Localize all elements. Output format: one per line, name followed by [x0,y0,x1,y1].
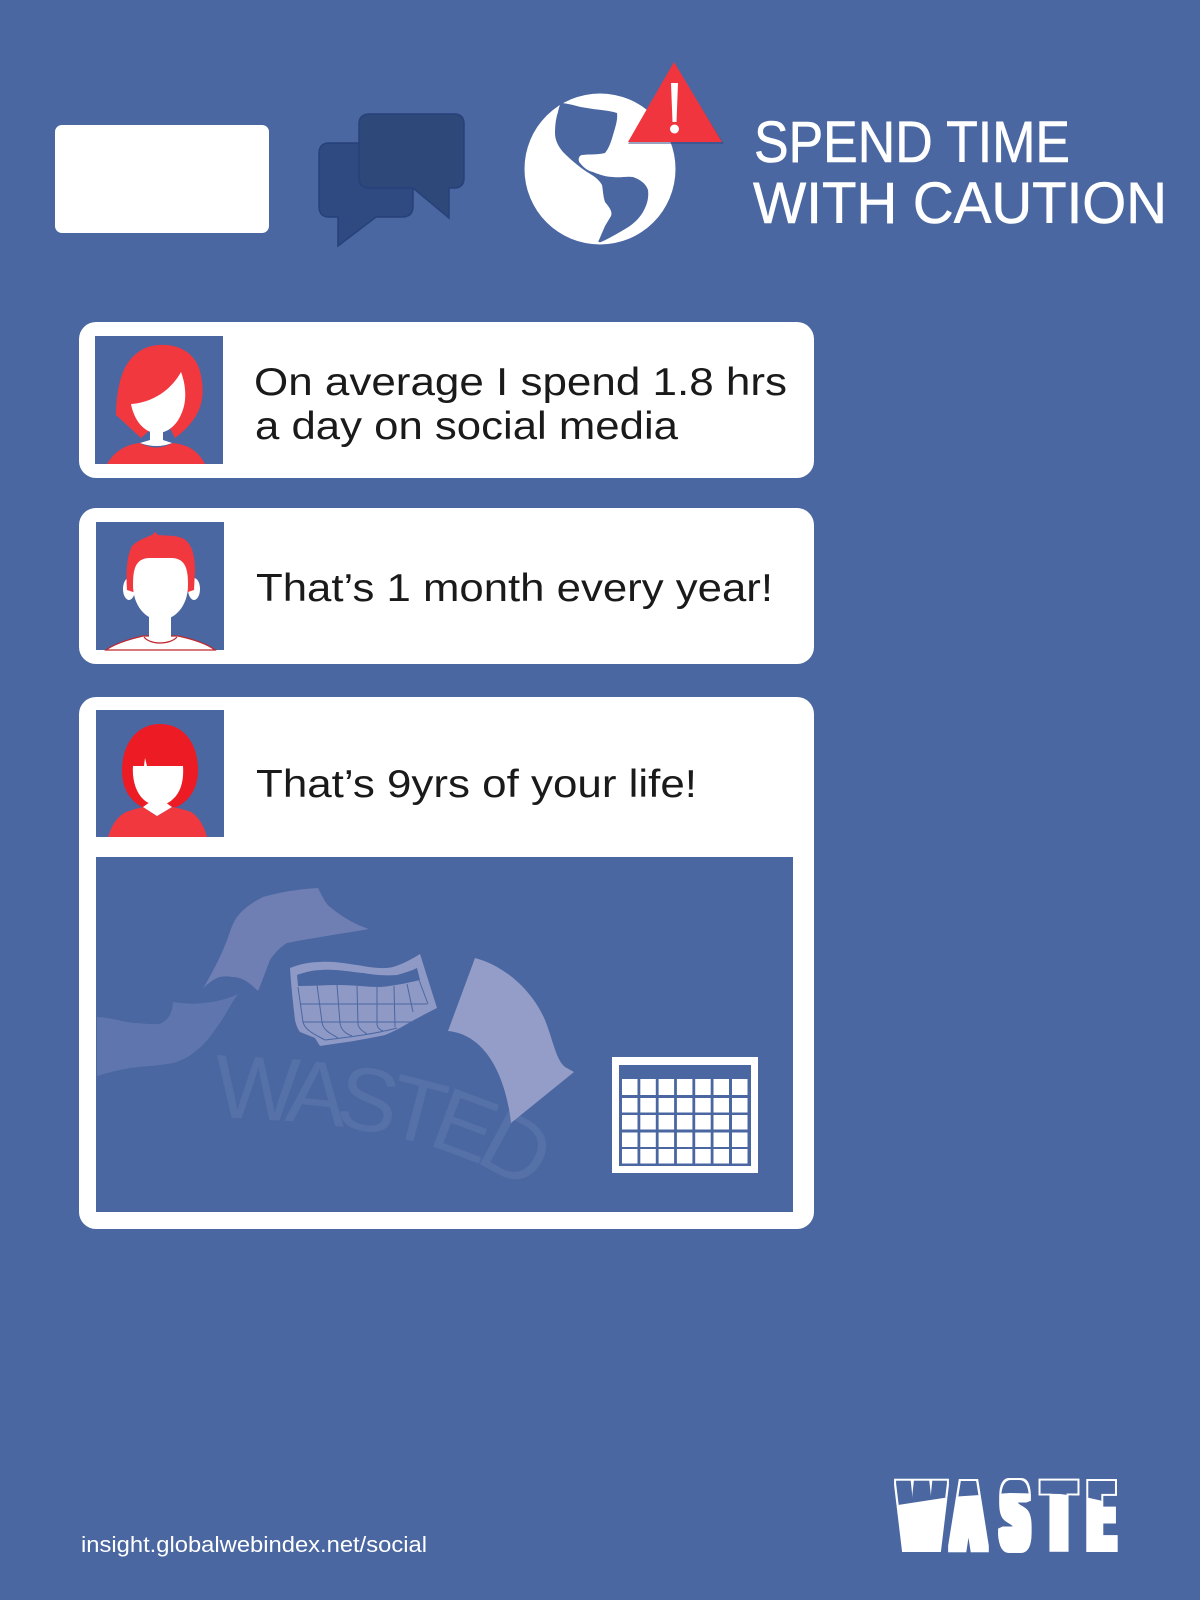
icon: chat bubbles [319,114,464,246]
logo: WASTE: S [1003,1461,1027,1570]
logo: WASTE: S [1003,1461,1027,1570]
avatar: man with short hair [96,522,224,650]
footer source link: insight.globalwebindex.net/social [81,1532,427,1557]
logo: WASTE: W [900,1461,943,1570]
logo: WASTE: A [953,1461,984,1570]
panel: nine years card [79,697,814,1229]
card text: That’s 9yrs of your life! [256,763,697,806]
avatar: woman with side-swept hair [95,336,223,464]
calendar fragment: medium [203,888,369,991]
logo: WASTE: A [953,1461,984,1570]
panel: flying calendar illustration [96,857,793,1212]
card text: That’s 1 month every year! [256,567,773,610]
logo: WASTE [894,1478,1118,1553]
wasted arc text: WASTED [217,1055,546,1179]
avatar: woman with bob hair [96,710,224,837]
card text: On average I spend 1.8 hrs [254,361,787,404]
calendar fragment: strong [448,958,574,1123]
title: SPEND TIME [754,110,1070,175]
card text: a day on social media [255,405,678,448]
icon: globe with warning triangle [524,62,724,244]
panel: daily average card [79,322,814,478]
calendar fragment: faint [97,994,238,1076]
text: E [1090,1461,1113,1570]
icon: white placeholder box [55,125,269,233]
warped calendar [290,954,437,1046]
wasted arc text [217,1055,546,1179]
logo: WASTE: W [900,1461,943,1570]
card text [254,361,787,448]
logo: WASTE: T [1044,1461,1074,1570]
title [753,110,1167,236]
panel: one month card [79,508,814,664]
title: WITH CAUTION [753,171,1167,236]
text: E [1090,1461,1113,1570]
logo: WASTE: T [1044,1461,1074,1570]
icon: calendar [612,1057,758,1173]
